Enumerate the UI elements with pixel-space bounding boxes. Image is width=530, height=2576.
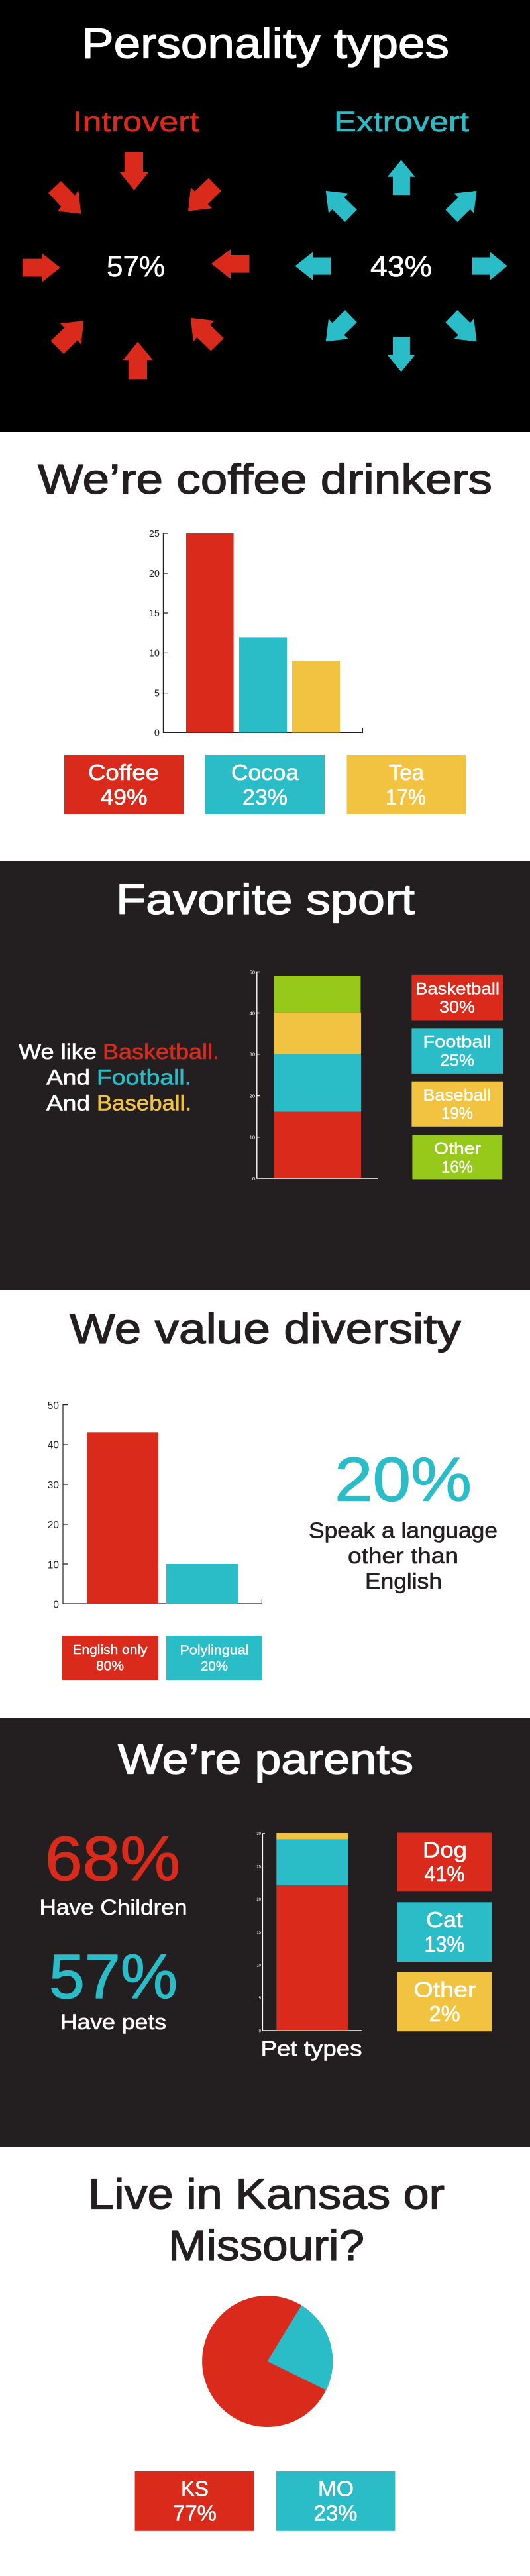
text block: sports we like: We like <box>19 1040 97 1064</box>
bar chart: languages <box>48 1400 262 1610</box>
legend: Football 25% <box>411 1028 503 1074</box>
legend: Baseball 19%: Baseball <box>423 1086 492 1105</box>
bar chart: drinks: 5 <box>154 689 160 699</box>
callout: 20% polylingual: English <box>365 1569 442 1593</box>
legend: Football 25%: 25% <box>440 1051 474 1070</box>
callout: 57% have pets: 57% <box>49 1942 178 2012</box>
callout: 68% have children: 68% <box>45 1824 180 1894</box>
legend: Coffee 49% <box>64 755 184 814</box>
text block: sports we like: Baseball. <box>97 1091 191 1115</box>
legend: Polylingual 20%: 20% <box>201 1659 228 1674</box>
legend: Dog 41% <box>398 1833 492 1891</box>
legend: KS 77% <box>135 2471 254 2531</box>
legend: MO 23%: MO <box>318 2477 354 2501</box>
text block: sports we like: And <box>46 1091 90 1115</box>
legend: Baseball 19% <box>411 1082 503 1127</box>
stacked bar chart: sports: 30 <box>250 1052 255 1058</box>
bar chart: languages: 20 <box>48 1520 59 1531</box>
legend: Cat 13%: Cat <box>426 1907 463 1932</box>
legend: Cocoa 23% <box>205 755 325 814</box>
legend: KS 77%: KS <box>181 2477 209 2501</box>
heading: Live in Kansas or Missouri?: Live in Kansas or <box>88 2170 445 2218</box>
legend: Polylingual 20% <box>166 1636 262 1680</box>
legend: Basketball 30% <box>411 975 503 1021</box>
panel: diversity <box>0 1290 530 1718</box>
stacked bar chart: sports: 0 <box>252 1176 255 1182</box>
bar chart: languages: 40 <box>48 1439 59 1451</box>
legend: Tea 17% <box>347 755 466 814</box>
legend: English only 80%: English only <box>73 1643 147 1657</box>
legend: Other 2%: Other <box>413 1977 476 2001</box>
legend: Other 2%: 2% <box>429 2001 460 2026</box>
label: Extrovert: Extrovert <box>334 106 469 138</box>
legend: Cocoa 23%: Cocoa <box>231 760 299 785</box>
heading: Live in Kansas or Missouri? <box>88 2170 445 2269</box>
stacked bar chart: pet types: 0 <box>259 2029 262 2033</box>
heading: We're coffee drinkers: We’re coffee drinkers <box>38 455 492 503</box>
text block: sports we like: Football. <box>97 1066 191 1090</box>
legend: Other 2% <box>398 1972 492 2031</box>
heading: Favorite sport: Favorite sport <box>116 875 415 923</box>
icon: inward red arrows <box>23 152 249 379</box>
panel: coffee drinkers <box>0 432 530 861</box>
stacked bar chart: sports: 50 <box>250 969 255 976</box>
panel: personality types <box>0 0 530 432</box>
text block: sports we like <box>19 1040 219 1115</box>
legend: English only 80% <box>62 1636 158 1680</box>
bar chart: drinks: 0 <box>154 728 160 738</box>
bar chart: languages: 10 <box>48 1559 59 1571</box>
panel: Kansas or Missouri <box>0 2147 530 2576</box>
stacked bar chart: pet types: 20 <box>256 1898 262 1902</box>
legend: Cat 13%: 13% <box>424 1932 465 1956</box>
bar chart: drinks: 25 <box>149 529 160 539</box>
legend: Other 16% <box>412 1135 502 1179</box>
stacked bar chart: sports: 20 <box>250 1093 255 1099</box>
legend: Other 16%: Other <box>434 1140 481 1158</box>
legend: Tea 17%: 17% <box>386 785 426 809</box>
stacked bar chart: sports <box>250 969 378 1182</box>
callout: 20% polylingual: 20% <box>335 1444 472 1514</box>
heading: Live in Kansas or Missouri?: Missouri? <box>168 2221 364 2269</box>
legend: Football 25%: Football <box>423 1033 492 1052</box>
callout: 57% have pets: Have pets <box>60 2010 166 2034</box>
stacked bar chart: pet types: 15 <box>256 1931 262 1935</box>
bar chart: drinks: 20 <box>149 569 160 579</box>
callout: 68% have children <box>40 1824 187 1919</box>
pie chart: KS vs MO <box>202 2296 333 2427</box>
heading: We're parents: We’re parents <box>118 1735 413 1783</box>
legend: Polylingual 20%: Polylingual <box>180 1643 249 1657</box>
callout: 20% polylingual: Speak a language <box>309 1518 498 1542</box>
heading: We value diversity: We value diversity <box>70 1305 461 1353</box>
panel: parents <box>0 1718 530 2147</box>
text block: sports we like: And <box>46 1066 90 1090</box>
legend: Cocoa 23%: 23% <box>242 785 288 809</box>
legend: Coffee 49%: Coffee <box>88 760 159 785</box>
value: 43%: 43% <box>370 251 432 283</box>
legend: Tea 17%: Tea <box>389 760 425 785</box>
bar chart: languages: 0 <box>53 1600 59 1610</box>
bar chart: languages: 30 <box>48 1480 59 1491</box>
legend: Cat 13% <box>398 1902 492 1962</box>
panel: favorite sport <box>0 861 530 1290</box>
legend: Basketball 30%: Basketball <box>415 980 500 998</box>
legend: Baseball 19%: 19% <box>441 1104 473 1123</box>
stacked bar chart: sports: 40 <box>250 1010 255 1016</box>
legend: Basketball 30%: 30% <box>439 998 475 1017</box>
bar chart: drinks: 15 <box>149 608 160 619</box>
caption: Pet types: Pet types <box>261 2037 362 2061</box>
text block: sports we like: Basketball. <box>103 1040 219 1064</box>
legend: MO 23%: 23% <box>314 2501 358 2526</box>
stacked bar chart: sports: 10 <box>250 1135 255 1141</box>
callout: 20% polylingual <box>309 1444 498 1593</box>
stacked bar chart: pet types <box>256 1832 362 2061</box>
icon: outward teal arrows <box>295 160 507 372</box>
callout: 20% polylingual: other than <box>348 1543 458 1568</box>
legend: Dog 41%: 41% <box>424 1862 465 1886</box>
stacked bar chart: pet types: 10 <box>256 1964 262 1968</box>
legend: Coffee 49%: 49% <box>101 785 147 809</box>
legend: MO 23% <box>276 2471 395 2531</box>
bar chart: languages: 50 <box>48 1400 59 1412</box>
stacked bar chart: pet types: 5 <box>259 1997 262 2001</box>
legend: English only 80%: 80% <box>96 1659 124 1674</box>
stacked bar chart: pet types: 25 <box>256 1866 262 1870</box>
legend: Other 16%: 16% <box>441 1158 473 1176</box>
stacked bar chart: pet types: 30 <box>256 1832 262 1836</box>
heading: Personality types: Personality types <box>81 20 449 68</box>
bar chart: drinks <box>149 529 362 738</box>
callout: 68% have children: Have Children <box>40 1895 187 1919</box>
label: Introvert: Introvert <box>73 106 199 138</box>
legend: KS 77%: 77% <box>173 2501 217 2526</box>
bar chart: drinks: 10 <box>149 648 160 659</box>
value: 57%: 57% <box>107 251 165 283</box>
legend: Dog 41%: Dog <box>423 1837 467 1862</box>
